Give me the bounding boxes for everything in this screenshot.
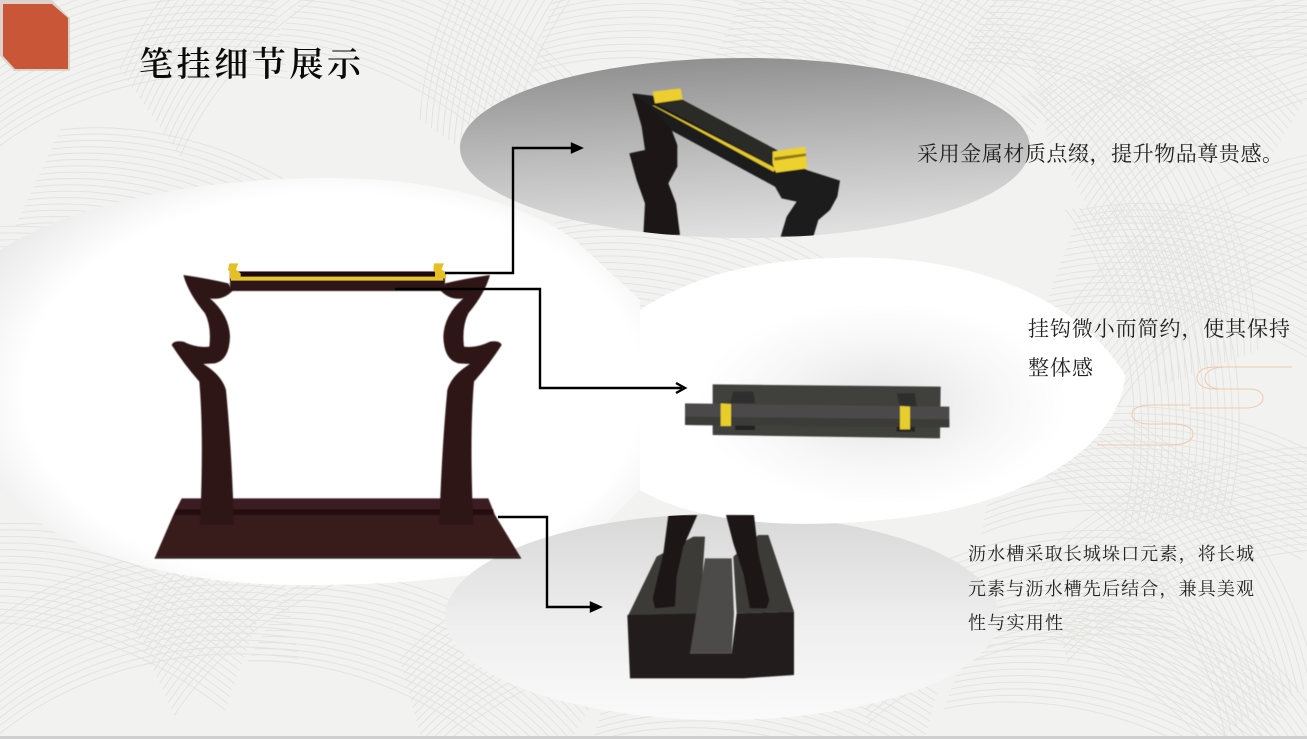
channel (690, 558, 734, 653)
far hook (653, 88, 683, 103)
arrow: main rail to top detail (445, 144, 581, 273)
left photo backdrop (0, 178, 640, 585)
caption: hook description (1028, 317, 1290, 380)
caption: metal accents: 采用金属材质点缀，提升物品尊贵感。 (917, 142, 1283, 167)
main pen rack render (154, 263, 521, 559)
decorative cloud lines (640, 367, 1292, 445)
hook detail render (685, 384, 949, 438)
front face (627, 612, 794, 678)
near hook (773, 147, 807, 173)
gold rail (652, 105, 777, 172)
middle photo backdrop (640, 258, 1125, 524)
arrow: top bar to hook detail (395, 289, 685, 393)
top faces (628, 537, 705, 615)
right post (439, 275, 502, 525)
title: 笔挂细节展示 (139, 46, 363, 84)
left post (629, 93, 680, 235)
caption: drainage groove description: 元素与沥水槽先后结合，兼具美观 (968, 579, 1254, 599)
caption: drainage groove description: 沥水槽采取长城垛口元素，将长城 (968, 544, 1254, 564)
bottom photo backdrop (445, 514, 999, 720)
caption: drainage groove description (968, 544, 1254, 633)
bottom edge strip (0, 736, 1307, 739)
gold hooks (228, 263, 241, 278)
top bar (230, 272, 445, 291)
beam and right wing (632, 93, 840, 237)
top photo backdrop (460, 58, 1030, 238)
base (154, 498, 521, 559)
arrow: base to base detail (498, 517, 600, 611)
caption: hook description: 挂钩微小而简约，使其保持 (1028, 317, 1290, 342)
base detail render (627, 515, 794, 678)
beam top face (656, 99, 777, 167)
caption: drainage groove description: 性与实用性 (968, 613, 1063, 633)
caption: hook description: 整体感 (1028, 356, 1093, 380)
red corner badge (0, 0, 70, 71)
gold rail (231, 277, 443, 281)
left post (172, 275, 234, 525)
top detail render (629, 88, 840, 237)
legs (653, 515, 697, 608)
